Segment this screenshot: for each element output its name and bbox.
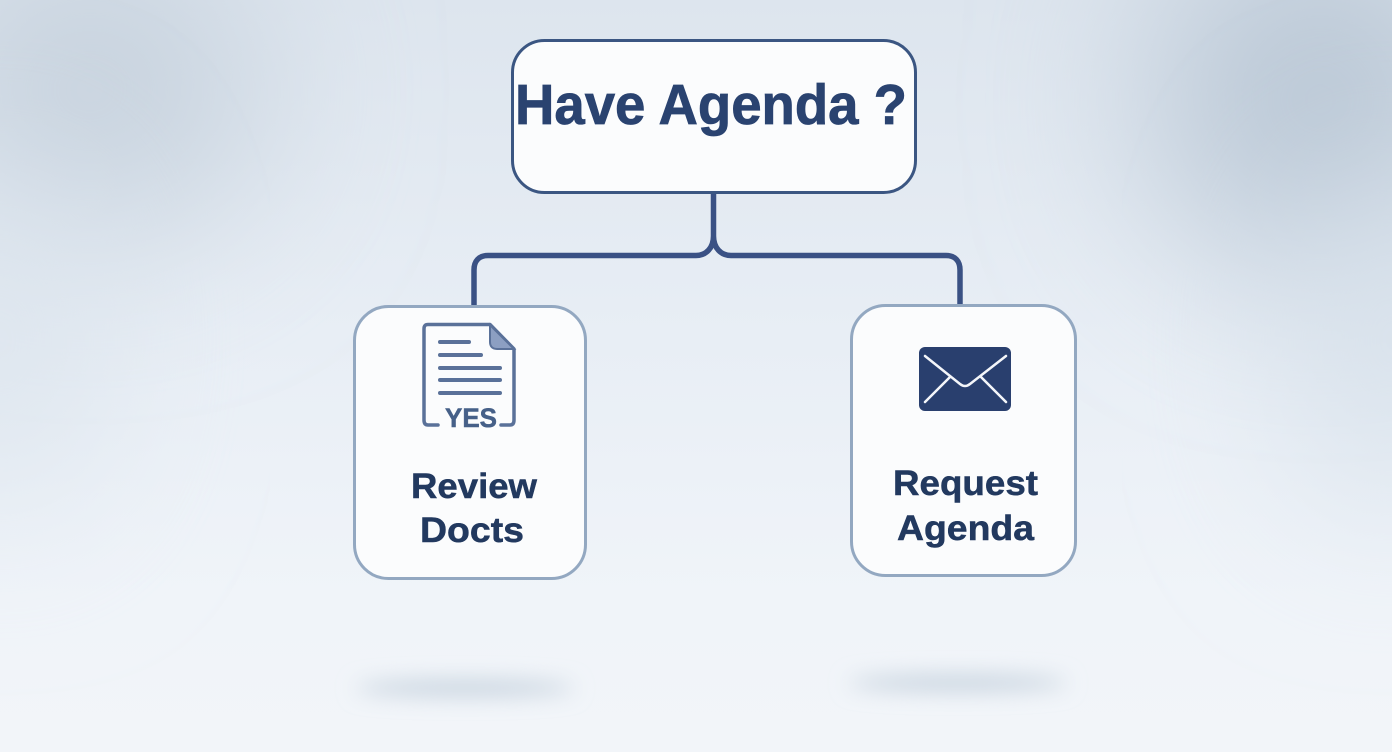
- label: request agenda: Agenda: [897, 509, 1035, 548]
- label: request agenda: [893, 464, 1038, 548]
- panel: have agenda question: [512, 40, 916, 192]
- icon: envelope: [919, 347, 1011, 411]
- connector: branching lines: [474, 193, 960, 306]
- label: review docts: Review: [411, 467, 538, 506]
- shadow: under right card: [848, 676, 1068, 690]
- icon: document with yes: [424, 324, 514, 433]
- label: review docts: [411, 467, 538, 550]
- icon label: yes: YES: [445, 403, 497, 433]
- label: request agenda: Request: [893, 464, 1038, 503]
- heading: have agenda: Have Agenda ?: [515, 73, 907, 137]
- label: review docts: Docts: [420, 511, 524, 550]
- panel: review docs: [354, 306, 586, 578]
- shadow: under left card: [355, 681, 575, 695]
- panel: request agenda: [852, 306, 1076, 576]
